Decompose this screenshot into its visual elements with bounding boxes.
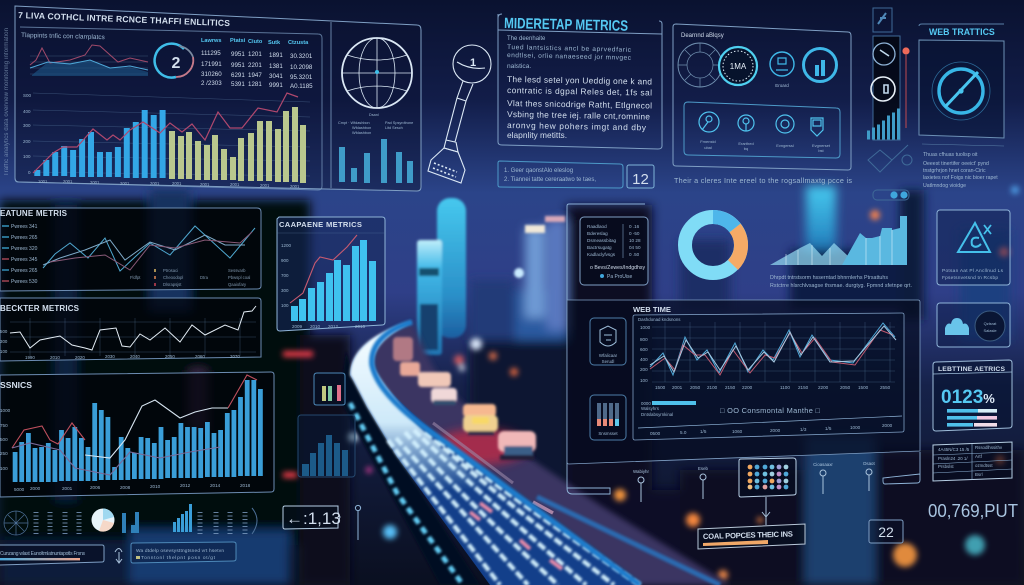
- globe legend: Dsanl: [369, 113, 379, 117]
- panel: web time: Walsyhrs: [641, 406, 660, 411]
- panel: capacity metrics: 700: [281, 273, 289, 278]
- pin markers row: Dsaot: [863, 461, 876, 466]
- panel: becketed metrics: 2050: [165, 354, 175, 359]
- main bar and line chart: 400: [23, 109, 31, 114]
- heading: metrics: MIDERETAP METRICS: [504, 15, 628, 35]
- main bar and line chart: [23, 93, 310, 189]
- panel: web time: 2100: [707, 385, 718, 390]
- panel: right summary table: o Bevs/Zewes/Indgdhsy: [590, 265, 645, 271]
- panel: right summary table: Raadlaod: [587, 224, 607, 229]
- cars on the road: [393, 337, 536, 460]
- panel: capacity metrics: 900: [281, 258, 289, 263]
- main bar and line chart: 2001: [120, 181, 130, 186]
- number box 12: [627, 165, 654, 188]
- area chart caption: Dhrpdt tntrstsorm hsserntad bhnrnlerhs Ptrsattuhs: [770, 275, 888, 281]
- data table: 1891: [269, 52, 283, 59]
- data table: 5391: [231, 81, 245, 88]
- data table: 95.3201: [290, 74, 313, 81]
- data table: [201, 38, 313, 90]
- panel: statistics bar chart: 2012: [180, 483, 191, 488]
- web traffic notes: Thuas cfhuas tuolisp oit: [923, 152, 978, 158]
- legend list: Pwrees 320: [11, 246, 38, 252]
- inner icon row: bq: [744, 146, 748, 151]
- panel: large right frame: [567, 204, 645, 494]
- intro text: The deenhaite: [507, 36, 546, 42]
- data table: Ctzusta: [288, 40, 309, 46]
- round icon: tool: [873, 43, 895, 65]
- panel: right summary table: Dsmeassbitag: [587, 238, 617, 243]
- ring with number 2: [155, 44, 193, 78]
- data table box: Prasln24 .20 1/: [938, 456, 968, 461]
- data table: Sutk: [268, 40, 281, 46]
- globe legend: Litd Sesch: [385, 126, 403, 130]
- large speed gauge: 1MA: [730, 62, 747, 71]
- column: small widgets: [867, 8, 910, 140]
- panel: right summary table: 0 .50: [629, 252, 640, 257]
- legend list: Pwrees 265: [11, 235, 38, 241]
- chart frame: [633, 313, 904, 440]
- panel: web time: 1100: [780, 385, 790, 390]
- panel: midway metrics: [498, 14, 662, 149]
- panel: becketed metrics: 1990: [25, 355, 35, 360]
- statistics bars: [13, 380, 263, 482]
- web traffic notes: laxietes nof Foigs nic bioer rapet: [923, 175, 998, 181]
- panel: right summary table: 0 -50: [629, 231, 640, 236]
- callout: coal popces: [698, 524, 805, 549]
- data table: 310260: [201, 71, 222, 78]
- donut chart: [685, 217, 741, 273]
- panel: statistics bar chart: 2008: [120, 485, 131, 490]
- chart key: Cheoodopl: [163, 275, 183, 280]
- road surface: [372, 322, 730, 585]
- info box: [131, 542, 236, 563]
- data table: Ciuto: [248, 39, 263, 45]
- panel: becketed metrics: 300: [0, 339, 8, 344]
- pin markers row: Eseb: [698, 466, 709, 471]
- info box: Wa dtdelp osevsysttngtsned vrt hsetvn: [136, 548, 224, 554]
- icon box: face with lock: Serudl: [602, 359, 614, 364]
- body text: aronvg hew pohers imgt and dby: [507, 120, 647, 132]
- small line chart: [30, 45, 148, 76]
- body text: Vsbing the tree iej. ralle cnt,romnine: [507, 109, 650, 122]
- body text: elapnlity metitts.: [507, 130, 567, 140]
- intro text: [507, 36, 632, 70]
- inner icon row: Fmenstd: [700, 139, 716, 144]
- panel: feature metrics: [0, 208, 261, 291]
- panel: statistics bar chart: 2001: [62, 486, 73, 491]
- panel: statistics bar chart: 1000: [0, 408, 11, 413]
- panel: statistics bar chart: [0, 372, 274, 497]
- main bar and line chart: 0: [28, 170, 31, 175]
- big number: 0123%: [941, 387, 995, 408]
- lane base: [350, 322, 640, 585]
- body text: [507, 74, 652, 140]
- intro text: Tued lantsistics ancl be aprvedfaric: [507, 44, 632, 54]
- lane dashes: [388, 430, 640, 585]
- panel: becketed metrics: 2020: [75, 355, 85, 360]
- panel: web time: [567, 300, 920, 484]
- chart key: Dlsrapsjst: [163, 282, 182, 287]
- panel: web time: 2000: [770, 428, 781, 433]
- guard rail: [372, 322, 640, 585]
- number box 1,13: ←:1,13: [286, 509, 341, 528]
- heading: web time: WEB TIME: [633, 305, 671, 314]
- data table: Lawrws: [201, 38, 222, 44]
- multi-line chart: [43, 226, 255, 271]
- numbered list box: 2. Tiannei tatte cereraatwo te taes,: [504, 177, 596, 183]
- chart key: Ptrosaci: [163, 268, 178, 273]
- panel: capacity metrics: 2010: [310, 324, 321, 329]
- panel: web time: 200: [640, 367, 648, 372]
- globe legend: Cmpt · Wfdashbon: [338, 121, 370, 125]
- data table: 171991: [201, 61, 222, 68]
- panel: becketed metrics: 2030: [105, 354, 115, 359]
- panel: becketed metrics: 2060: [195, 354, 205, 359]
- panel: web time: 2001: [672, 385, 683, 390]
- body text: contratic is dgpal Reles det, 1fs sal: [507, 85, 652, 98]
- data table box: ozmdtsst: [975, 463, 993, 468]
- main bar and line chart: 2001: [172, 181, 182, 186]
- area chart: [770, 216, 907, 265]
- progress box: [0, 545, 104, 565]
- pin markers row: [633, 461, 876, 525]
- globe legend: Wfdashbon: [352, 126, 371, 130]
- panel: capacity metrics: 300: [281, 288, 289, 293]
- panel: statistics bar chart: 2010: [150, 484, 161, 489]
- web traffic notes: tnstgrhrjon hnet coran-Ciric: [923, 168, 986, 174]
- panel: listing metrics: [933, 360, 1012, 431]
- progress box: Cunzang wlast Eunoltrnlatnuntapotls Frsns: [0, 551, 86, 557]
- main bar and line chart: 2001: [63, 179, 73, 184]
- numbered list box: 1. Geer qaonstAlo eleslog: [504, 168, 573, 174]
- panel: top-left traffic analytics: [15, 6, 421, 191]
- heading: BECKTER METRICS: [0, 304, 80, 313]
- dial: [932, 62, 990, 120]
- round icon: bar ring: [804, 48, 836, 82]
- inner icon row: Evgnerset: [812, 143, 831, 148]
- panel: capacity metrics: 2016: [355, 324, 366, 329]
- data table: 1201: [248, 51, 262, 58]
- data table box: Bsrl: [975, 472, 983, 477]
- panel: web time: 400: [640, 357, 648, 362]
- large speed gauge: [678, 43, 757, 87]
- data table: 3041: [269, 73, 283, 80]
- chart key: Dtra: [200, 275, 209, 280]
- road with light trails: [340, 322, 730, 585]
- heading: web traffic: WEB TRATTICS: [929, 27, 995, 37]
- panel: people icon: Salasle: [983, 328, 997, 333]
- data table box: 4A45N/C3 15 /5: [938, 447, 970, 452]
- panel: statistics bar chart: 750: [0, 423, 8, 428]
- number box 22: [869, 520, 903, 543]
- heading: capacity metrics: CAAPAENE METRICS: [279, 220, 362, 229]
- panel: web time: Dashdonad kndsnons: [638, 317, 681, 322]
- data table box: Prsbslst: [938, 464, 954, 469]
- panel: right summary table: Bactrsugatg: [587, 245, 612, 250]
- chart key: Qaaiofary: [228, 282, 247, 287]
- panel: web time: 2050: [840, 385, 851, 390]
- data table: 2201: [248, 62, 262, 69]
- decorative connector with hex: [868, 145, 912, 172]
- glowing towers: [417, 198, 565, 355]
- white line chart: [10, 306, 256, 350]
- data table: 9951: [231, 62, 245, 69]
- pin markers row: Cioasaaxr: [813, 462, 833, 467]
- inner icon row: ubal: [704, 145, 712, 150]
- subheading: Tlappints tnfic con clarrplatcs: [21, 32, 106, 41]
- toggle pill: [873, 190, 909, 200]
- data table: Ptatsi: [230, 38, 246, 44]
- dim bar chart panel: [298, 415, 355, 477]
- main bar and line chart: 300: [23, 123, 31, 128]
- data table: 1381: [269, 63, 283, 70]
- panel: becketed metrics: 100: [0, 349, 8, 354]
- number box 22: 22: [878, 524, 894, 540]
- intro text: nalstica.: [507, 63, 531, 70]
- number box 12: 12: [632, 171, 649, 188]
- heading: SSNICS: [0, 380, 32, 390]
- main bar and line chart: S00: [23, 93, 32, 98]
- icon box: mini bars: Snsmsset: [598, 431, 618, 436]
- panel: statistics bar chart: 2014: [210, 483, 221, 488]
- pin marker: [355, 505, 361, 540]
- panel: statistics bar chart: 2006: [90, 485, 101, 490]
- panel: becketed metrics: 2040: [130, 354, 140, 359]
- legend list: Pwrees 265: [11, 268, 38, 274]
- panel: web time: 1/5: [825, 426, 832, 431]
- body text: Vlat thes snicodrige Ratht, Etlgnecol: [507, 98, 652, 111]
- heading: LEBTTINE AETRICS: [938, 366, 1005, 373]
- panel: web time: 0000: [641, 401, 651, 406]
- panel: warning triangle: Potsan Aat Pl Ancllnud Ls: [942, 268, 1004, 274]
- legend list: Pwrees 341: [11, 224, 38, 230]
- round icon: bell: [871, 77, 895, 101]
- round icon: badge: [770, 52, 794, 88]
- web traffic notes: [922, 144, 1004, 189]
- panel: web time: 2150: [798, 385, 809, 390]
- red slider dot: [902, 47, 910, 55]
- area chart caption: [770, 275, 912, 289]
- inner panel outline: [15, 27, 322, 190]
- ring with number 2: 2: [172, 55, 181, 72]
- data table: 111295: [201, 50, 221, 57]
- numbered list box: [498, 161, 623, 188]
- panel: becketed metrics: [0, 298, 261, 361]
- globe legend: Wfdashbon: [352, 131, 371, 135]
- panel: capacity metrics: 2009: [292, 324, 303, 329]
- panel: web time: 1500: [858, 385, 869, 390]
- legend text: □ OO Consmontal Manthe □: [720, 406, 821, 415]
- data table: 9991: [269, 82, 283, 89]
- icon: wireframe globe: [342, 38, 412, 108]
- left edge vertical caption: Traffic analytics data overview monitoring information: [4, 28, 10, 176]
- panel: web time: 800: [640, 337, 648, 342]
- main bar and line chart: 200: [23, 139, 31, 144]
- callout: coal popces: COAL POPCES THEIC INS: [703, 529, 793, 541]
- panel: becketed metrics: 2010: [50, 355, 60, 360]
- panel: web time: 2200: [742, 385, 753, 390]
- chart key: Pbwspl coal: [228, 275, 250, 280]
- dark side of the highway: [340, 350, 480, 585]
- panel: statistics bar chart: 2000: [30, 486, 41, 491]
- panel: right summary table: 04 50: [629, 245, 641, 250]
- chart key: Fldfpt: [130, 275, 141, 280]
- data table: 1281: [248, 81, 262, 88]
- inner icon row: bst: [818, 148, 825, 153]
- panel: right summary table: Kadlaclyfvsgs: [587, 252, 616, 257]
- main bar and line chart: 2001: [290, 184, 300, 189]
- info box: Tonntonl thelpnt posn ot/gt: [141, 555, 216, 561]
- globe legend: Pad Spsyrdtrone: [385, 121, 413, 125]
- data table: 30.3201: [290, 53, 313, 60]
- inner icon row: [684, 102, 840, 158]
- data table: 10.2098: [290, 64, 313, 71]
- legend list: Pwrees 530: [11, 279, 38, 285]
- capacity bars: [291, 240, 376, 321]
- panel: web time: 1500: [655, 385, 666, 390]
- icon box: face with lock: [590, 318, 626, 365]
- icon: triangle: [958, 223, 991, 252]
- small bars box: [314, 373, 345, 405]
- globe legend: [338, 113, 413, 135]
- panel: web time: 1/3: [800, 427, 807, 432]
- legend list: Pwrees 345: [11, 257, 38, 263]
- pie icon: [92, 508, 114, 532]
- capacity red line: [290, 235, 357, 303]
- data table: 9951: [231, 51, 245, 58]
- panel label: Dearnnd aBlqsy: [681, 33, 724, 39]
- icon: joystick device: 1: [470, 57, 476, 69]
- panel: web time: 600: [640, 347, 648, 352]
- data table: 1947: [248, 72, 262, 79]
- caption under gauges: Their a cleres Inte ereel to the rogsallmaxtg pcce is: [674, 176, 852, 185]
- panel: warning triangle: Fpsetsnvetsnd tn Rcsbp: [942, 275, 998, 281]
- panel: web time: 1000: [640, 325, 651, 330]
- side bar chart: [339, 139, 413, 183]
- chart key: Sessvarb: [228, 268, 246, 273]
- heading: feature metrics: EATUNE METRIS: [0, 209, 68, 218]
- panel: web time: 2150: [725, 385, 736, 390]
- dot matrix box: [739, 458, 796, 497]
- widget strip: small icons and charts: [4, 504, 257, 535]
- main bar and line chart: 1001: [38, 179, 48, 184]
- panel: web time: 1/5: [700, 429, 707, 434]
- panel: becketed metrics: 2070: [230, 354, 240, 359]
- web traffic notes: Uatlmndog vioidge: [923, 183, 966, 189]
- data table box: [933, 442, 1012, 481]
- inner icon row: Erarthed: [738, 141, 754, 146]
- panel: capacity metrics: 1200: [281, 243, 292, 248]
- large readout: 00,769,PUT: [928, 500, 1018, 521]
- body text: The lesd setel yon Ueddig one k and: [507, 74, 652, 87]
- panel: capacity metrics: [277, 217, 385, 331]
- rising small bars: [867, 108, 900, 140]
- data table: 2 /2303: [201, 80, 222, 87]
- panel: statistics bar chart: 250: [0, 451, 8, 456]
- panel: web time: 0500: [650, 431, 661, 436]
- small arrow icon: [115, 548, 122, 563]
- web traffic notes: Oeeest tinertifer oeeict' pynd: [923, 161, 989, 167]
- outer dashed lane: [350, 403, 463, 585]
- panel: web time: 2050: [690, 385, 701, 390]
- data table box: Rssodlhssithv: [975, 445, 1003, 450]
- inner icon row: Evngerssl: [776, 143, 794, 148]
- icon: joystick device: [428, 45, 491, 183]
- data table: 6291: [231, 72, 245, 79]
- panel: web time: 100: [640, 378, 648, 383]
- panel: web time: Dntslabsyrnkinal: [641, 412, 673, 417]
- panel: web traffic gauge: [919, 24, 1004, 138]
- progress strip: [652, 401, 696, 405]
- main bar and line chart: 100: [23, 154, 31, 159]
- pin markers row: Wabiyhr: [633, 469, 650, 474]
- panel: warning triangle: [937, 210, 1010, 285]
- panel: statistics bar chart: 2018: [240, 483, 251, 488]
- panel: capacity metrics: 100: [281, 303, 289, 308]
- heading: traffic analytics: 7 LIVA COTHCL INTRE RCNCE THAFFI ENLLITICS: [18, 10, 230, 28]
- main bar and line chart: 2001: [260, 183, 270, 188]
- main bar and line chart: 2001: [150, 181, 160, 186]
- radar circle: [4, 511, 28, 535]
- panel: becketed metrics: 500: [0, 329, 8, 334]
- panel: gauges dashboard: [673, 24, 851, 170]
- main bar and line chart: 2001: [200, 182, 210, 187]
- statistics lines: [12, 375, 257, 475]
- main bar and line chart: 2001: [230, 182, 240, 187]
- panel: right summary table: [580, 217, 648, 285]
- panel: web time: 2000: [882, 423, 893, 428]
- panel: right summary table: 0 .16: [629, 224, 640, 229]
- panel: web time: 5.0: [680, 430, 687, 435]
- panel: right summary table: 10 28: [629, 238, 641, 243]
- panel: statistics bar chart: 5000: [14, 487, 25, 492]
- icon box: face with lock: Wfalicaar: [599, 353, 618, 358]
- legend list: [2, 224, 38, 285]
- intro text: endtlsei, orlie nanaeseed jor mnvgec: [507, 52, 632, 62]
- data table box: Artf: [975, 454, 983, 459]
- panel: capacity metrics: 2012: [328, 324, 339, 329]
- background: blurred skyline: [0, 186, 1024, 585]
- chart key: [130, 268, 250, 287]
- white lead-in band: [350, 322, 500, 507]
- panel: people icon: [937, 303, 1010, 347]
- panel: web time: 2550: [880, 385, 891, 390]
- panel: people icon: Qzlsrat: [984, 321, 997, 326]
- data table: A0.1185: [290, 83, 313, 90]
- panel: right summary table: Bdereslag: [587, 231, 608, 236]
- panel: web time: 1000: [850, 425, 861, 430]
- panel: statistics bar chart: 100: [0, 466, 8, 471]
- panel: web time: 1060: [732, 429, 743, 434]
- web time line chart: [650, 323, 896, 375]
- main bar and line chart: 2001: [90, 180, 100, 185]
- panel: statistics bar chart: 500: [0, 437, 8, 442]
- icon box: mini bars: [590, 395, 626, 440]
- metric bars: [947, 409, 997, 427]
- panel: web time: 2200: [818, 385, 829, 390]
- panel: right summary table: Pa ProUise: [607, 274, 633, 280]
- area chart caption: Rstctrre hlsrchlvsagse thsmae. durgtyg. Fpmnd sfetnpe qrt.: [770, 283, 912, 289]
- round icon: badge: Eroard: [775, 83, 789, 88]
